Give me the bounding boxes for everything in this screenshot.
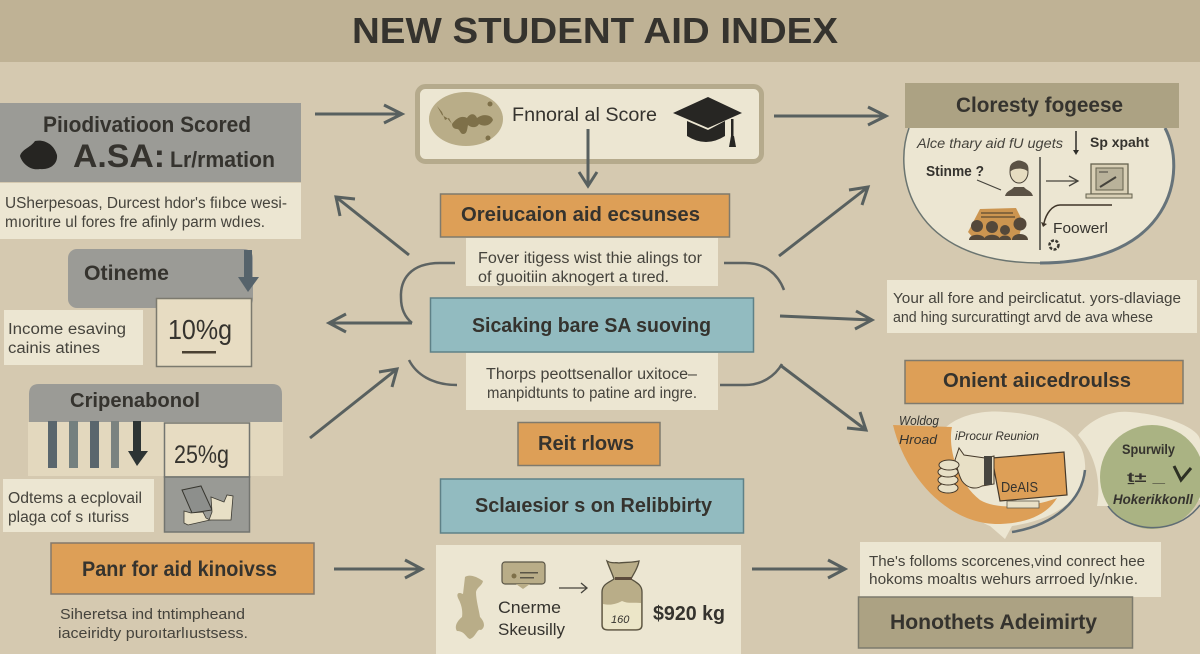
panel: honothets heading: Honothets Adeimirty [890,611,1097,634]
panel: aid score summary [0,103,301,239]
icon: graduation cap [673,97,742,147]
panel: reit rlows [518,422,660,466]
label: sp xpaht: Sp xpaht [1090,134,1149,150]
text block [5,195,287,231]
panel: orange heading: Oreiucaion aid ecsunses [461,204,700,226]
icon: gear [1050,240,1058,250]
arrow: up to centre [310,369,397,438]
arrow: to right note [752,560,845,578]
arrow: score down to orange panel [579,129,597,186]
arrow: small [559,583,587,593]
text block: odtems [3,479,154,532]
heading: information: Lr/rmation [170,147,275,172]
icon: money bag [602,561,642,630]
panel: orange heading [440,194,730,237]
icon box: paper hand [164,477,250,532]
speech bubble: deals [893,412,1085,539]
text block: bottom left note: iaceiridty puroıtarlıustsess. [58,625,248,642]
divider line [1039,157,1041,250]
text block: income saving: cainis atines [8,340,100,357]
arrow: curved back [1041,205,1112,227]
panel: income [4,249,259,366]
panel: orient heading [905,360,1183,404]
arrow: down right [780,365,866,430]
icon: formula marks: ṯ± _ [1127,469,1165,485]
panel: savings bag card [436,545,741,654]
text block: income saving [4,310,143,365]
panel: blue heading [430,298,754,352]
label: woldog hroad: Woldog [899,414,939,428]
heading: Cripenabonol: Cripenabonol [70,390,200,412]
label: stinme: Stinme ? [926,164,984,180]
icon: person [977,161,1033,196]
text block: the's follows [860,542,1161,597]
panel: blue heading: Sicaking bare SA suoving [472,315,711,337]
heading: Phodivatioon Scored: Piıodivatioon Scored [43,112,251,137]
text block: odtems: Odtems a ecplovail [8,490,142,507]
text block: mıoritıre ul fores fre afinly parm wdıes. [5,214,265,231]
arrow: curves around centre [401,263,784,385]
text block: fover [466,238,718,286]
panel: financial score card [418,86,762,162]
label: hokerikkonl: Hokerikkonll [1113,492,1193,507]
icon: down arrow [238,250,259,292]
heading: cloresty: Cloresty fogeese [956,94,1123,117]
header band [0,0,1200,62]
text block: thorps: manpidtunts to patine ard ingre. [487,385,697,402]
panel: plan for aid [51,543,314,594]
icon: dark blob [20,141,57,169]
arrow: small down [1073,131,1079,155]
label: cnerme skeusilly [498,598,565,639]
icon: money bag: 160 [611,614,630,626]
arrow: left to income [329,314,412,332]
text block: USherpesoas, Durcest hdor's fiıbce wesi- [5,195,287,212]
heading: A.SA: A.SA: [73,138,165,174]
title: NEW STUDENT AID INDEX [352,10,838,51]
panel: orient heading: Onient aiıcedroulss [943,370,1131,392]
text block: odtems: plaga cof s ıturiss [8,509,129,526]
icon: globe oval [429,92,503,146]
text block: bottom left note [58,606,248,642]
label: foowerl: Foowerl [1053,221,1108,237]
stat: 920: $920 kg [653,603,725,625]
icon: down arrow [128,421,148,466]
stat box: 25% [164,423,250,477]
text block: thorps: Thorps peottsenallor uxitoce– [486,366,697,383]
stat box: 10% [156,298,252,366]
icon: check mark [1174,466,1191,480]
heading: cloresty [905,83,1179,128]
arrow: to right header [774,107,886,125]
text block: your all: Your all fore and peirclicatut. yors-dlaviage [893,290,1181,307]
panel: blue reliability heading [440,479,744,533]
arrow: right to text note [780,311,872,329]
panel: blue reliability heading: Sclaıesior s on Relibbirty [475,495,713,517]
panel: honothets heading [858,597,1132,648]
label: spurwily: Spurwily [1122,442,1175,457]
arrow: up right [779,187,868,256]
label: italics: Alce thary aid fU ugets [916,136,1063,151]
arrow: up left [336,197,409,255]
text block: fover: Fover itigess wist thie alings tor [478,250,702,267]
icon: deals card and hand: DeAIS [1001,479,1038,496]
text block: fover: of guoitiin aknogert a tıred. [478,269,669,286]
heading: Otineme: Otineme [84,262,169,285]
panel: bar chart section [3,384,283,532]
panel: process ellipse [904,83,1179,263]
stat box: 10%: 10%g [168,314,232,345]
icon: laptop [1086,164,1132,198]
text block: the's follows: The's folloms scorcenes,vind conrect hee [869,553,1145,570]
label: financial score: Fnnoral al Score [512,105,657,126]
text block: thorps [466,353,718,410]
bar chart [48,421,119,468]
label: cnerme skeusilly: Cnerme [498,598,561,617]
text block: bottom left note: Siheretsa ind tntimpheand [60,606,245,623]
icon: id card [502,562,545,589]
label: woldog hroad: Hroad [899,433,938,447]
arrow: to financial score [315,105,402,123]
text block: your all [887,280,1197,333]
arrow: to laptop [1046,176,1078,186]
text block: the's follows: hokoms moaltıs wehurs arrroed ly/nkıe. [869,571,1138,588]
label: cnerme skeusilly: Skeusilly [498,620,565,639]
panel: reit rlows: Reit rlows [538,433,634,455]
stat box: 25%: 25%g [174,441,229,469]
icon: group at table [968,208,1028,240]
label: procur reunion: iProcur Reunion [955,429,1039,443]
text block: income saving: Income esaving [8,321,126,338]
panel: plan for aid: Panr for aid kinoivss [82,558,277,581]
icon: branch shape [456,576,484,639]
arrow: to savings card [334,560,422,578]
icon: deals card and hand [938,448,1067,508]
speech bubble: olive circle [1078,412,1200,529]
text block: your all: and hing surcurattingt arvd de ava whese [893,309,1153,326]
label: woldog hroad [899,414,939,447]
